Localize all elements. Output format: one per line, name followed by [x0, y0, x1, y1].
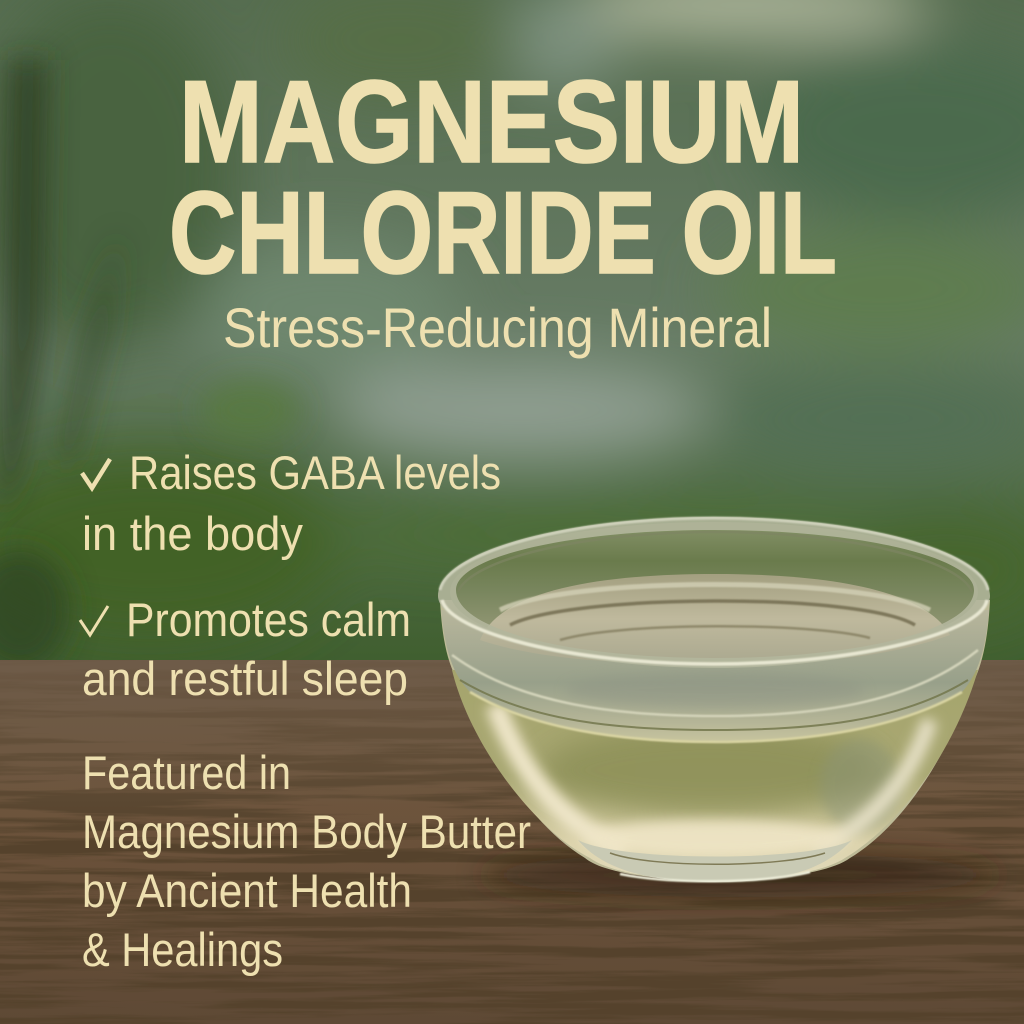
title [169, 56, 837, 298]
icon: check mark [80, 606, 108, 635]
glass bowl of oil [438, 517, 990, 890]
glass side silhouette [440, 600, 990, 880]
benefit: GABA: in the body [82, 507, 303, 560]
oil surface [480, 574, 950, 664]
subtitle: Stress-Reducing Mineral [223, 296, 772, 359]
title: MAGNESIUM [179, 56, 804, 187]
bowl base [578, 840, 852, 882]
icon: check mark [82, 459, 110, 488]
rim band [441, 610, 989, 742]
glass rim [438, 517, 990, 668]
featured note: Magnesium Body Butter [82, 805, 531, 858]
benefit: GABA: Raises GABA levels [129, 446, 501, 499]
featured note [82, 746, 531, 976]
benefit: GABA [82, 446, 501, 560]
background: blurred forest [0, 0, 1024, 670]
bowl interior back wall [450, 522, 978, 662]
title: CHLORIDE OIL [169, 167, 837, 298]
featured note: by Ancient Health [82, 864, 412, 917]
benefit: calm and sleep [80, 593, 411, 705]
benefit: calm and sleep: Promotes calm [126, 593, 411, 646]
wooden table [0, 650, 1024, 1024]
featured note: Featured in [82, 746, 291, 799]
featured note: & Healings [82, 923, 283, 976]
oil in lower bowl [452, 670, 978, 875]
benefit: calm and sleep: and restful sleep [82, 652, 408, 705]
